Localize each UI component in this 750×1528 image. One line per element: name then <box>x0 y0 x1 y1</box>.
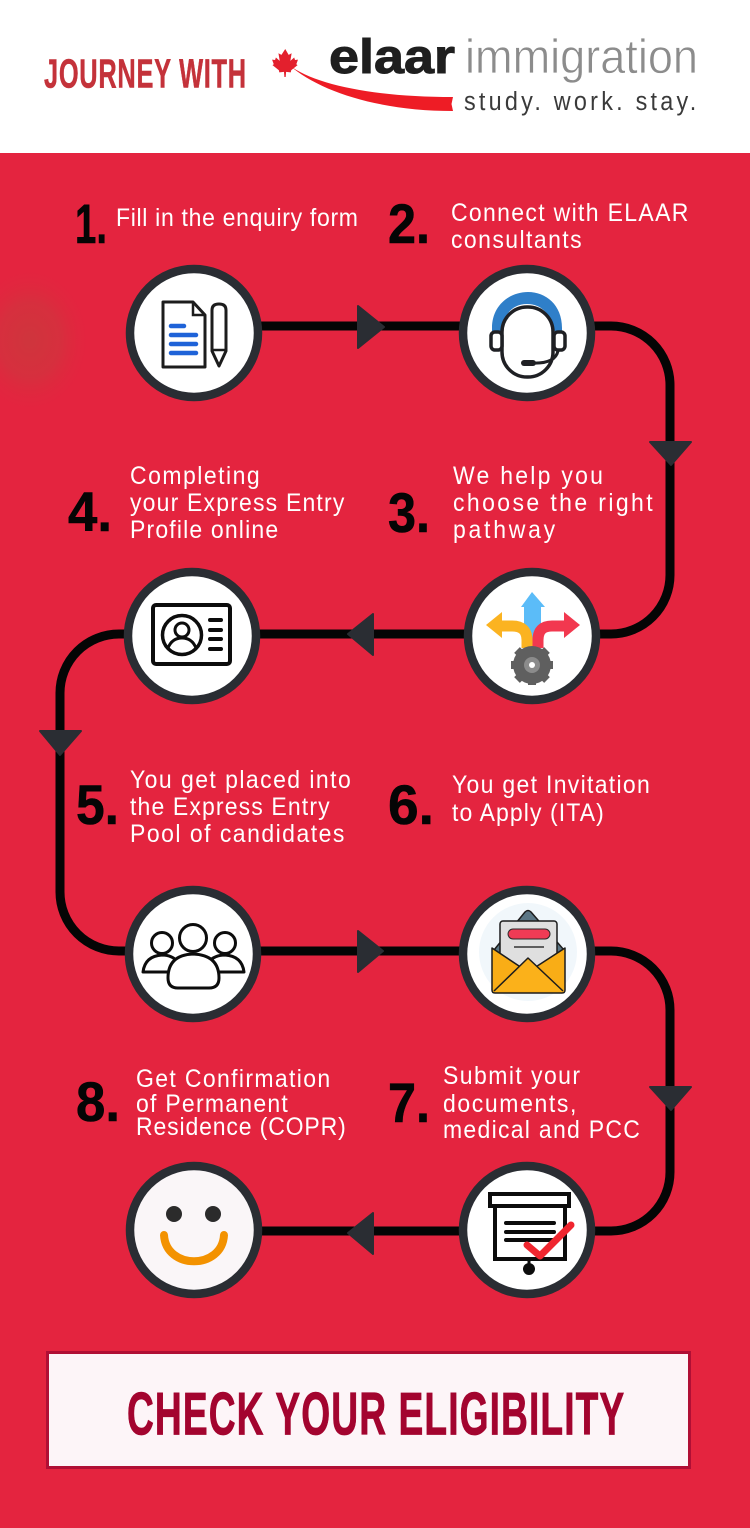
arrow: step 2 to 3 <box>650 442 691 465</box>
icon: form and pencil <box>130 269 258 397</box>
step 4: label: Profile online <box>130 516 278 544</box>
arrow: step 5 to 6 <box>358 931 383 972</box>
arrow: step 4 to 5 <box>40 731 81 755</box>
icon: profile card <box>128 572 256 700</box>
step 8: label: of Permanent <box>136 1090 288 1118</box>
step 5: label <box>76 766 351 848</box>
step 3: label: 3. <box>388 481 430 544</box>
icon: pathway arrows and gear <box>468 572 596 700</box>
step 3: label: We help you <box>453 462 603 490</box>
step 5: label: 5. <box>76 773 119 836</box>
swoosh <box>289 65 453 111</box>
step 1: label <box>75 192 358 255</box>
step 7: label <box>388 1062 640 1144</box>
icon: headset support <box>463 269 591 397</box>
logo word: elaar: elaar <box>329 31 455 84</box>
step 2: label: Connect with ELAAR <box>451 199 688 227</box>
icon: maple leaf <box>272 49 298 77</box>
step 7: label: medical and PCC <box>443 1116 640 1144</box>
icon: smiley face <box>130 1166 258 1294</box>
step 5: label: the Express Entry <box>130 793 330 821</box>
icon: envelope with letter <box>463 890 591 1018</box>
step 6: label: You get Invitation <box>452 771 650 799</box>
step 4: label: your Express Entry <box>130 489 344 517</box>
step 4: label: Completing <box>130 462 260 490</box>
panel: header <box>0 0 750 153</box>
step 7: label: documents, <box>443 1090 576 1118</box>
step 5: label: Pool of candidates <box>130 820 344 848</box>
step 4: label <box>68 462 344 544</box>
step 4: label: 4. <box>68 480 112 543</box>
arrow: step 7 to 8 <box>348 1213 373 1254</box>
step 6: label <box>388 771 650 836</box>
step 1: label: 1. <box>75 192 107 255</box>
step 2: label: 2. <box>388 192 430 255</box>
logo: elaar immigration <box>272 31 698 116</box>
step 2: label <box>388 192 688 255</box>
step 7: label: Submit your <box>443 1062 580 1090</box>
step 8: label: Get Confirmation <box>136 1065 330 1093</box>
arrow: step 1 to 2 <box>358 306 384 348</box>
step 8: label: Residence (COPR) <box>136 1113 346 1141</box>
connector path <box>60 326 670 1231</box>
arrow: step 3 to 4 <box>348 614 373 655</box>
step 8: label: 8. <box>76 1070 120 1133</box>
step 5: label: You get placed into <box>130 766 351 794</box>
step 3: label: pathway <box>453 516 555 544</box>
step 6: label: to Apply (ITA) <box>452 799 604 827</box>
button: check your eligibility <box>48 1352 690 1468</box>
step 6: label: 6. <box>388 773 434 836</box>
step 2: label: consultants <box>451 226 582 254</box>
step 7: label: 7. <box>388 1071 430 1134</box>
arrow: step 6 to 7 <box>650 1087 691 1110</box>
tagline: study. work. stay. <box>464 88 696 116</box>
heading: journey with: JOURNEY WITH <box>44 51 246 97</box>
step 1: label: Fill in the enquiry form <box>116 204 358 232</box>
step 8: label <box>76 1065 346 1141</box>
icon: group of people <box>129 890 257 1018</box>
icon: presentation board with check <box>463 1166 591 1294</box>
logo word: immigration: immigration <box>465 31 698 84</box>
button: check your eligibility: CHECK YOUR ELIGIBILITY <box>127 1380 624 1448</box>
step 3: label <box>388 462 653 544</box>
step 3: label: choose the right <box>453 489 653 517</box>
